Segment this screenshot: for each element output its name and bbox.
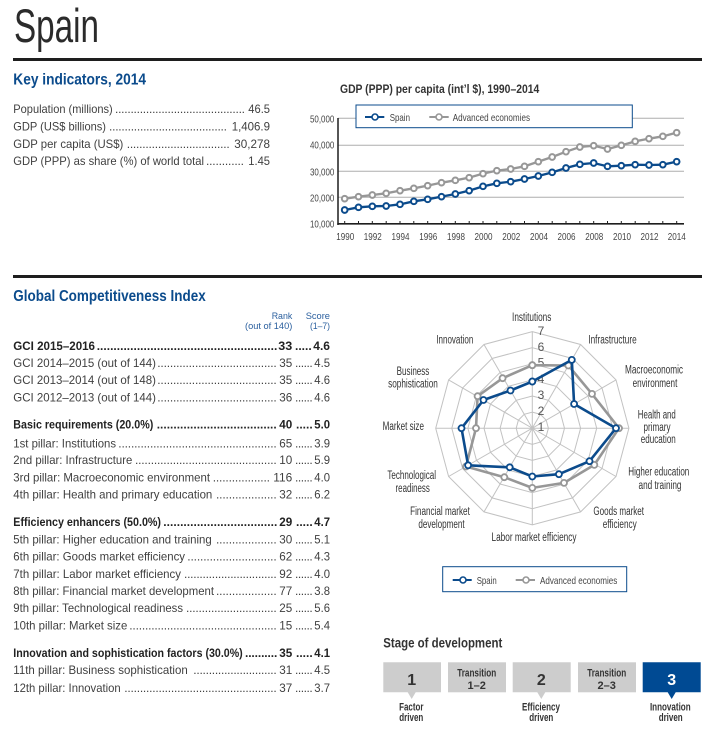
row: 5th pillar: 5th pillar: Higher education and training	[13, 532, 212, 546]
row: 11th pillar: 31	[279, 663, 293, 677]
row: efficiency enhancers: 4.7	[314, 515, 330, 529]
row: 1st pillar: 1st pillar: Institutions	[13, 436, 116, 450]
row: 1st pillar: ......	[295, 436, 313, 450]
row: innovation and sophistication: .....	[296, 646, 313, 660]
radar axis labels: efficiency	[603, 519, 637, 531]
row: 1st pillar: ..................................................	[118, 436, 277, 450]
row: GCI 2015-2016: .....	[295, 339, 312, 353]
row: 12th pillar	[13, 681, 330, 695]
stage 3: Innovation	[650, 702, 691, 714]
radar scale numbers: 5	[538, 356, 545, 370]
radar scale numbers: 2	[538, 404, 545, 418]
row: 10th pillar: ......	[295, 618, 313, 632]
row: 3rd pillar: 116	[273, 470, 293, 484]
row: innovation and sophistication: 4.1	[314, 646, 330, 660]
row: 2nd pillar: 10	[279, 453, 293, 467]
radar scale numbers: 4	[538, 372, 545, 386]
row: GCI 2013-2014: GCI 2013–2014 (out of 148)	[13, 373, 156, 387]
radar scale numbers: 1	[538, 420, 545, 434]
row: 1st pillar: 3.9	[314, 436, 330, 450]
row: basic requirements: Basic requirements (20.0%)	[13, 418, 153, 432]
row: GCI 2014-2015: 4.5	[314, 356, 330, 370]
indicator: GDP per capita: 30,278	[234, 137, 270, 151]
radar axis labels: Innovation	[436, 335, 473, 347]
row: 3rd pillar: ......	[295, 470, 313, 484]
column headers: (out of 140)	[245, 321, 292, 332]
stage 3: driven	[659, 712, 683, 724]
indicator: population: Population (millions)	[13, 102, 113, 116]
radar axis labels: Institutions	[512, 312, 552, 324]
legend: line chart	[356, 105, 632, 128]
row: 9th pillar: ......	[295, 601, 313, 615]
radar axis labels: environment	[633, 378, 678, 390]
row: GCI 2013-2014: ......	[295, 373, 313, 387]
row: 5th pillar: 30	[279, 532, 293, 546]
x-axis labels: 1992	[364, 231, 382, 243]
row: 12th pillar: ......	[295, 681, 313, 695]
radar axis labels: Labor market efficiency	[492, 532, 577, 544]
radar scale numbers: 3	[538, 388, 545, 402]
x-axis labels: 2002	[502, 231, 520, 243]
stage 2: 2	[537, 672, 546, 689]
row: 11th pillar: 11th pillar: Business sophistication	[13, 663, 188, 677]
row: 8th pillar: ...................	[216, 584, 277, 598]
x-axis labels: 1996	[419, 231, 437, 243]
row: 7th pillar: 7th pillar: Labor market efficiency	[13, 567, 181, 581]
transition 1-2	[448, 662, 506, 692]
row: GCI 2012-2013: 4.6	[314, 391, 330, 405]
row: 7th pillar	[13, 567, 330, 581]
indicator: GDP	[13, 120, 270, 134]
row: 2nd pillar: 5.9	[314, 453, 330, 467]
x-axis labels: 2008	[585, 231, 603, 243]
row: 9th pillar: 25	[279, 601, 293, 615]
row: efficiency enhancers: Efficiency enhancers (50.0%)	[13, 515, 161, 529]
row: GCI 2013-2014	[13, 373, 330, 387]
row: 7th pillar: ..............................	[184, 567, 277, 581]
row: GCI 2014-2015	[13, 356, 330, 370]
row: GCI 2014-2015: GCI 2014–2015 (out of 144)	[13, 356, 156, 370]
y-axis labels: 10,000	[310, 218, 334, 230]
column headers	[245, 311, 330, 332]
radar series: Spain	[462, 360, 616, 477]
radar axis labels: Macroeconomic	[625, 365, 683, 377]
row: 6th pillar: ......	[295, 549, 313, 563]
row: 3rd pillar: 3rd pillar: Macroeconomic environment	[13, 470, 211, 484]
row: 6th pillar: 4.3	[314, 549, 330, 563]
indicator: population: 46.5	[248, 102, 270, 116]
radar axis labels	[383, 312, 689, 544]
radar axis labels: primary	[644, 422, 671, 434]
series: Spain	[345, 162, 677, 210]
indicator: population	[13, 102, 270, 116]
row: 10th pillar: 15	[279, 618, 293, 632]
row: 10th pillar: ...............................................	[129, 618, 277, 632]
row: GCI 2015-2016: GCI 2015–2016	[13, 339, 95, 353]
line chart: GDP per capita	[310, 82, 686, 243]
radar grid	[436, 332, 629, 525]
y-axis labels	[310, 114, 334, 230]
radar chart	[383, 312, 689, 592]
heading: key indicators: Key indicators, 2014	[13, 71, 146, 88]
x-axis labels: 1990	[336, 231, 354, 243]
row: 6th pillar: ............................	[187, 549, 277, 563]
row: 2nd pillar	[13, 453, 330, 467]
row: 10th pillar	[13, 618, 330, 632]
row: GCI 2015-2016	[13, 339, 330, 353]
legend: radar chart	[443, 567, 627, 592]
row: GCI 2015-2016: 4.6	[313, 339, 330, 353]
row: 5th pillar: ...................	[216, 532, 277, 546]
row: 4th pillar: 4th pillar: Health and primary education	[13, 487, 212, 501]
radar axis labels: sophistication	[388, 378, 438, 390]
y-axis labels: 20,000	[310, 192, 334, 204]
row: 6th pillar: 6th pillar: Goods market efficiency	[13, 549, 185, 563]
row: 11th pillar: ...........................	[193, 663, 277, 677]
column headers: (1–7)	[310, 321, 330, 332]
radar axis labels: Financial market	[410, 506, 470, 518]
row: 9th pillar: .............................	[186, 601, 277, 615]
row: 5th pillar: 5.1	[314, 532, 330, 546]
row: GCI 2015-2016: ......................................................	[97, 339, 277, 353]
indicator: GDP share: ............	[206, 154, 244, 168]
radar axis labels: Goods market	[593, 506, 645, 518]
heading: stage of development: Stage of development	[383, 634, 503, 650]
row: 6th pillar	[13, 549, 330, 563]
transition 2-3	[578, 662, 636, 692]
row: 4th pillar: ......	[295, 487, 313, 501]
row: 10th pillar: 5.4	[314, 618, 330, 632]
row: 12th pillar: 37	[279, 681, 293, 695]
radar axis labels: Business	[397, 366, 430, 378]
column headers: Rank	[272, 311, 293, 322]
legend: line chart: Spain	[390, 112, 410, 124]
indicator: GDP: 1,406.9	[232, 120, 270, 134]
row: 5th pillar: ......	[295, 532, 313, 546]
x-axis labels: 1998	[447, 231, 465, 243]
row: 12th pillar: 12th pillar: Innovation	[13, 681, 121, 695]
row: GCI 2015-2016: 33	[278, 339, 293, 353]
row: efficiency enhancers: ..................................	[163, 515, 277, 529]
stage 3: 3	[667, 672, 676, 689]
row: efficiency enhancers: .....	[296, 515, 313, 529]
transition 2-3: Transition	[587, 668, 626, 680]
heading: GCI: Global Competitiveness Index	[13, 288, 206, 305]
x-axis labels: 1994	[392, 231, 410, 243]
row: basic requirements	[13, 418, 330, 432]
x-axis labels: 2012	[640, 231, 659, 243]
row: 3rd pillar	[13, 470, 330, 484]
indicator: GDP per capita: GDP per capita (US$)	[13, 137, 123, 151]
row: basic requirements: .....	[296, 418, 313, 432]
stage 1: 1	[407, 672, 416, 689]
x-axis labels	[336, 231, 686, 243]
chart title: GDP (PPP) per capita (int’l $), 1990–2014	[340, 82, 540, 96]
row: GCI 2012-2013	[13, 391, 330, 405]
row: 1st pillar	[13, 436, 330, 450]
transition 1-2: Transition	[457, 668, 496, 680]
row: 4th pillar: 32	[279, 487, 293, 501]
row: 1st pillar: 65	[279, 436, 293, 450]
stage 1: driven	[399, 712, 424, 724]
row: innovation and sophistication: 35	[279, 646, 293, 660]
row: GCI 2012-2013: ......................................	[157, 391, 277, 405]
stage 2	[513, 662, 571, 724]
indicator: GDP per capita	[13, 137, 270, 151]
row: 7th pillar: 92	[279, 567, 293, 581]
row: 8th pillar: 77	[279, 584, 293, 598]
row: basic requirements: ....................................	[157, 418, 277, 432]
radar scale numbers	[538, 324, 545, 434]
indicator: population: ..........................................	[115, 102, 245, 116]
x-axis labels: 2006	[558, 231, 576, 243]
radar axis labels: readiness	[396, 483, 430, 495]
row: GCI 2014-2015: ......................................	[157, 356, 277, 370]
legend: line chart: Advanced economies	[453, 112, 530, 124]
row: 7th pillar: ......	[295, 567, 313, 581]
stage 2: driven	[529, 712, 554, 724]
row: GCI 2012-2013: 36	[279, 391, 293, 405]
panel: stage of development	[383, 634, 701, 724]
column headers: Score	[306, 311, 330, 322]
row: GCI 2012-2013: GCI 2012–2013 (out of 144)	[13, 391, 156, 405]
row: 12th pillar: .................................................	[124, 681, 277, 695]
radar axis labels: and training	[638, 480, 682, 492]
row: 2nd pillar: 2nd pillar: Infrastructure	[13, 453, 133, 467]
row: 5th pillar	[13, 532, 330, 546]
row: 3rd pillar: 4.0	[314, 470, 330, 484]
row: 2nd pillar: .............................................	[135, 453, 277, 467]
y-axis labels: 30,000	[310, 166, 334, 178]
radar axis labels: Infrastructure	[588, 335, 637, 347]
y-axis labels: 50,000	[310, 114, 334, 126]
stage 1: Factor	[399, 702, 424, 714]
row: 11th pillar: ......	[295, 663, 313, 677]
series: advanced economies	[345, 133, 677, 199]
panel: key indicators	[13, 71, 270, 168]
x-axis labels: 2010	[613, 231, 631, 243]
row: 6th pillar: 62	[279, 549, 293, 563]
indicator: GDP share: GDP (PPP) as share (%) of world total	[13, 154, 204, 168]
radar axis labels: Health and	[638, 410, 676, 422]
indicator: GDP: ......................................	[109, 120, 227, 134]
y-axis labels: 40,000	[310, 140, 334, 152]
row: 4th pillar: 6.2	[314, 487, 330, 501]
row: 10th pillar: 10th pillar: Market size	[13, 618, 128, 632]
row: 4th pillar	[13, 487, 330, 501]
radar series: advanced economies	[466, 365, 619, 488]
row: 9th pillar: 9th pillar: Technological readiness	[13, 601, 183, 615]
legend: radar chart: Spain	[477, 575, 497, 587]
row: 8th pillar: ......	[295, 584, 313, 598]
row: innovation and sophistication: Innovation and sophistication factors (30.0%)	[13, 646, 243, 660]
row: 7th pillar: 4.0	[314, 567, 330, 581]
row: efficiency enhancers: 29	[279, 515, 293, 529]
x-axis labels: 2000	[474, 231, 493, 243]
row: 12th pillar: 3.7	[314, 681, 330, 695]
panel: Global Competitiveness Index table	[13, 288, 330, 695]
stage 1	[383, 662, 441, 724]
row: 2nd pillar: ......	[295, 453, 313, 467]
row: 9th pillar: 5.6	[314, 601, 330, 615]
row: GCI 2013-2014: 35	[279, 373, 293, 387]
row: 4th pillar: ...................	[216, 487, 277, 501]
row: innovation and sophistication: ..........	[245, 646, 277, 660]
row: basic requirements: 5.0	[314, 418, 330, 432]
radar axis labels: education	[641, 434, 676, 446]
row: 3rd pillar: ..................	[213, 470, 270, 484]
indicator: GDP: GDP (US$ billions)	[13, 120, 106, 134]
transition 2-3: 2–3	[598, 680, 616, 692]
row: basic requirements: 40	[279, 418, 293, 432]
radar axis labels: Market size	[383, 421, 424, 433]
title: Spain	[14, 0, 99, 52]
x-axis labels: 2004	[530, 231, 548, 243]
row: 11th pillar	[13, 663, 330, 677]
transition 1-2: 1–2	[468, 680, 486, 692]
row: 11th pillar: 4.5	[314, 663, 330, 677]
radar scale numbers: 6	[538, 340, 545, 354]
x-axis labels: 2014	[668, 231, 686, 243]
radar scale numbers: 7	[538, 324, 545, 338]
row: 9th pillar	[13, 601, 330, 615]
row: GCI 2013-2014: ......................................	[157, 373, 277, 387]
stage 2: Efficiency	[522, 702, 561, 714]
row: efficiency enhancers	[13, 515, 330, 529]
radar axis labels: Technological	[387, 470, 436, 482]
row: 8th pillar	[13, 584, 330, 598]
row: GCI 2013-2014: 4.6	[314, 373, 330, 387]
legend: radar chart: Advanced economies	[540, 575, 617, 587]
row: 8th pillar: 3.8	[314, 584, 330, 598]
stage 3	[643, 662, 701, 724]
row: GCI 2012-2013: ......	[295, 391, 313, 405]
row: GCI 2014-2015: 35	[279, 356, 293, 370]
row: GCI 2014-2015: ......	[295, 356, 313, 370]
radar axis labels: development	[418, 519, 465, 531]
row: 8th pillar: 8th pillar: Financial market development	[13, 584, 215, 598]
indicator: GDP share: 1.45	[248, 154, 270, 168]
indicator: GDP per capita: .................................	[127, 137, 230, 151]
